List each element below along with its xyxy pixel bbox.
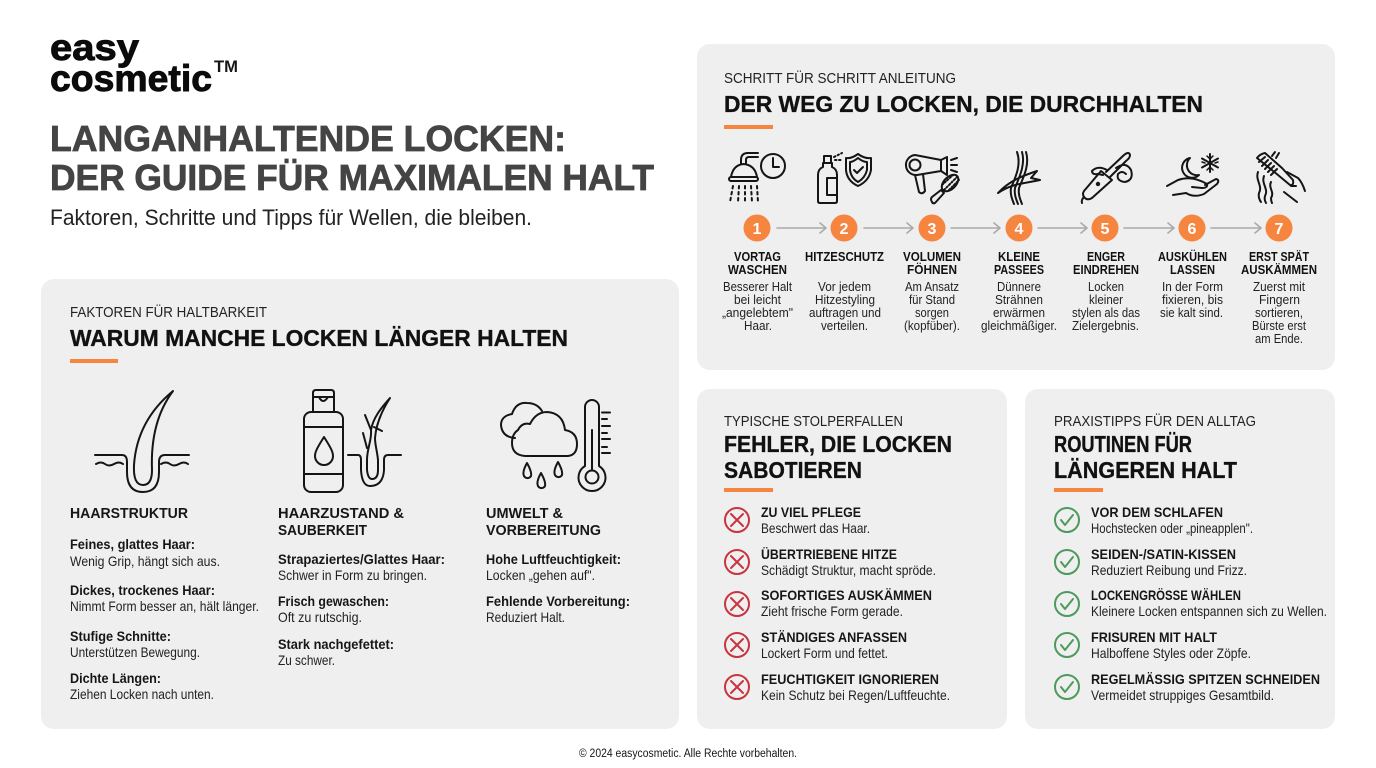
step 4 text: [981, 250, 1057, 333]
tip: curl size: LOCKENGRÖSSE WÄHLEN: [1091, 587, 1241, 603]
column: hair structure: Dichte Längen:: [70, 670, 161, 686]
panel: common mistakes: [697, 389, 1007, 729]
icon: heat protection spray and shield: [818, 153, 871, 203]
step 7 text: AUSKÄMMEN: [1241, 262, 1317, 277]
tip: silk pillow: Reduziert Reibung und Frizz.: [1091, 562, 1247, 578]
step 1 text: Haar.: [744, 319, 772, 333]
step 4 text: Strähnen: [995, 293, 1043, 307]
panel heading: mistakes: TYPISCHE STOLPERFALLEN: [724, 413, 903, 430]
column: hair structure: HAARSTRUKTUR: [70, 505, 188, 522]
step 1 text: VORTAG: [734, 250, 781, 264]
column: hair structure: [70, 505, 259, 702]
step 7 text: sortieren,: [1255, 306, 1303, 320]
title: LANGANHALTENDE LOCKEN:: [50, 118, 566, 159]
icon: hair follicle: [95, 391, 189, 492]
panel heading: factors: WARUM MANCHE LOCKEN LÄNGER HALTEN: [70, 325, 568, 351]
icon: hand with moon and snowflake: [1167, 154, 1218, 196]
step 2 text: Hitzestyling: [815, 293, 875, 307]
stepper: numbered circles and arrows: 2: [840, 221, 848, 238]
subtitle: Faktoren, Schritte und Tipps für Wellen, die bleiben.: [50, 205, 532, 230]
mistake: ignoring humidity: [725, 671, 950, 703]
panel heading: steps: SCHRITT FÜR SCHRITT ANLEITUNG: [724, 69, 956, 87]
stepper: numbered circles and arrows: 4: [1014, 221, 1024, 238]
column: hair condition and cleanliness: [278, 505, 445, 668]
panel: everyday tips: [1025, 389, 1335, 729]
column: hair structure: Wenig Grip, hängt sich aus.: [70, 553, 220, 569]
step 1 text: Besserer Halt: [723, 280, 792, 294]
panel heading: steps: DER WEG ZU LOCKEN, DIE DURCHHALTEN: [724, 91, 1203, 117]
tip: curl size: [1055, 587, 1327, 619]
step 1 text: „angelebtem": [722, 306, 793, 320]
step 4 text: PASSEES: [994, 263, 1044, 277]
mistake: excessive heat: Schädigt Struktur, macht spröde.: [761, 562, 936, 578]
stepper: numbered circles and arrows: 6: [1188, 221, 1196, 238]
step 7 text: am Ende.: [1255, 332, 1303, 346]
column: hair condition and cleanliness: Frisch gewaschen:: [278, 593, 389, 609]
step 3 text: FÖHNEN: [907, 262, 957, 277]
step 6 text: In der Form: [1162, 280, 1223, 294]
column: hair condition and cleanliness: Stark nachgefettet:: [278, 636, 394, 652]
tip: silk pillow: SEIDEN-/SATIN-KISSEN: [1091, 546, 1236, 562]
step 7 text: Bürste erst: [1252, 319, 1306, 333]
column: hair structure: Ziehen Locken nach unten.: [70, 686, 214, 702]
column: hair structure: Dickes, trockenes Haar:: [70, 582, 215, 598]
step 2 text: HITZESCHUTZ: [805, 250, 884, 264]
column: hair structure: Feines, glattes Haar:: [70, 536, 195, 552]
mistake: too much care: Beschwert das Haar.: [761, 520, 870, 536]
column: hair condition and cleanliness: HAARZUSTAND &: [278, 505, 404, 522]
step 3 text: Am Ansatz: [905, 280, 959, 294]
stepper: numbered circles and arrows: 3: [928, 221, 936, 238]
step 5 text: Zielergebnis.: [1072, 319, 1139, 333]
mistake: constant touching: STÄNDIGES ANFASSEN: [761, 629, 907, 645]
panel: factors for durability: [41, 279, 679, 729]
mistake: excessive heat: [725, 546, 936, 578]
panel heading: routines: [1054, 412, 1256, 492]
mistake: too much care: ZU VIEL PFLEGE: [761, 504, 861, 520]
step 2 text: auftragen und: [809, 306, 881, 320]
step 4 text: erwärmen: [993, 306, 1045, 320]
stepper: numbered circles and arrows: [744, 214, 1292, 242]
tip: trim ends regularly: REGELMÄSSIG SPITZEN SCHNEIDEN: [1091, 671, 1320, 687]
column: environment and preparation: [486, 505, 630, 625]
column: environment and preparation: Hohe Luftfeuchtigkeit:: [486, 551, 621, 567]
step 3 text: VOLUMEN: [903, 250, 961, 264]
step 4 text: Dünnere: [997, 280, 1041, 294]
step 6 text: LASSEN: [1170, 263, 1215, 277]
column: environment and preparation: UMWELT &: [486, 505, 563, 522]
panel heading: routines: LÄNGEREN HALT: [1054, 457, 1238, 483]
icon: curling iron with curl: [1082, 153, 1132, 203]
mistake: excessive heat: ÜBERTRIEBENE HITZE: [761, 546, 897, 562]
step 7 text: Zuerst mit: [1253, 280, 1305, 294]
step 5 text: stylen als das: [1072, 306, 1140, 320]
panel heading: routines: PRAXISTIPPS FÜR DEN ALLTAG: [1054, 412, 1256, 430]
tip: hairstyles with hold: [1055, 629, 1251, 661]
step 7 text: [1241, 249, 1317, 346]
step 6 text: AUSKÜHLEN: [1158, 249, 1227, 264]
panel heading: routines: ROUTINEN FÜR: [1054, 431, 1192, 457]
footer: © 2024 easycosmetic. Alle Rechte vorbehalten.: [579, 748, 797, 760]
tip: hairstyles with hold: Halboffene Styles oder Zöpfe.: [1091, 645, 1251, 661]
column: environment and preparation: Reduziert Halt.: [486, 609, 565, 625]
icon: clouds, rain and thermometer: [501, 400, 610, 491]
tip: trim ends regularly: [1055, 671, 1320, 703]
step 3 text: [903, 250, 961, 333]
mistake: ignoring humidity: Kein Schutz bei Regen/Luftfeuchte.: [761, 687, 950, 703]
step 2 text: [805, 250, 884, 333]
column: environment and preparation: Fehlende Vorbereitung:: [486, 593, 630, 609]
step 3 text: sorgen: [915, 306, 949, 320]
mistake: immediate combing: Zieht frische Form gerade.: [761, 603, 903, 619]
step 3 text: (kopfüber).: [904, 319, 960, 333]
panel heading: mistakes: SABOTIEREN: [724, 457, 862, 483]
stepper: numbered circles and arrows: 7: [1274, 221, 1284, 238]
column: environment and preparation: Locken „gehen auf".: [486, 567, 595, 583]
tip: before sleeping: [1055, 504, 1253, 536]
logo: easycosmetic: TM: [214, 57, 238, 76]
step 5 text: [1072, 250, 1140, 333]
column: hair condition and cleanliness: Schwer in Form zu bringen.: [278, 567, 427, 583]
column: hair structure: Unterstützen Bewegung.: [70, 644, 200, 660]
panel: step by step guide: [697, 44, 1335, 370]
panel heading: factors: [70, 303, 568, 363]
column: hair condition and cleanliness: Zu schwer.: [278, 652, 335, 668]
tip: silk pillow: [1055, 546, 1247, 578]
stepper: numbered circles and arrows: 1: [752, 221, 762, 238]
step 7 text: Fingern: [1259, 293, 1300, 307]
tip: hairstyles with hold: FRISUREN MIT HALT: [1091, 629, 1217, 645]
step 2 text: verteilen.: [821, 319, 868, 333]
icon: hair strands and clip: [998, 152, 1040, 204]
tip: trim ends regularly: Vermeidet struppiges Gesamtbild.: [1091, 687, 1274, 703]
step 4 text: gleichmäßiger.: [981, 319, 1057, 333]
mistake: constant touching: Lockert Form und fettet.: [761, 645, 888, 661]
step 6 text: sie kalt sind.: [1160, 306, 1223, 320]
tip: curl size: Kleinere Locken entspannen sich zu Wellen.: [1091, 603, 1327, 619]
step 5 text: ENGER: [1087, 250, 1125, 264]
icon: hair dryer and brush: [906, 155, 961, 203]
column: hair condition and cleanliness: Strapaziertes/Glattes Haar:: [278, 551, 445, 567]
step 5 text: Locken: [1088, 280, 1124, 294]
step 7 text: ERST SPÄT: [1249, 249, 1309, 264]
mistake: too much care: [725, 504, 870, 536]
mistake: immediate combing: [725, 587, 932, 619]
title: DER GUIDE FÜR MAXIMALEN HALT: [50, 157, 654, 198]
icon: comb and wavy hair: [1257, 152, 1305, 203]
step 1 text: bei leicht: [734, 293, 781, 307]
step 5 text: kleiner: [1089, 293, 1123, 307]
step 6 text: fixieren, bis: [1162, 293, 1223, 307]
mistake: immediate combing: SOFORTIGES AUSKÄMMEN: [761, 587, 932, 603]
step 2 text: Vor jedem: [818, 280, 871, 294]
panel heading: factors: FAKTOREN FÜR HALTBARKEIT: [70, 303, 267, 321]
step 5 text: EINDREHEN: [1073, 263, 1139, 277]
column: hair structure: Stufige Schnitte:: [70, 628, 171, 644]
column: hair condition and cleanliness: Oft zu rutschig.: [278, 609, 362, 625]
column: hair condition and cleanliness: SAUBERKEIT: [278, 522, 367, 539]
panel heading: steps: [724, 69, 1203, 129]
logo: easycosmetic: [50, 27, 238, 99]
panel heading: mistakes: FEHLER, DIE LOCKEN: [724, 431, 952, 457]
mistake: constant touching: [725, 629, 907, 661]
step 4 text: KLEINE: [998, 250, 1040, 264]
icon: shower and clock: [729, 153, 785, 202]
step 1 text: [722, 250, 793, 333]
title: [50, 118, 654, 198]
icon: shampoo bottle and damaged hair: [304, 390, 401, 492]
step 1 text: WASCHEN: [728, 263, 787, 277]
column: hair structure: Nimmt Form besser an, hält länger.: [70, 598, 259, 614]
tip: before sleeping: VOR DEM SCHLAFEN: [1091, 504, 1223, 520]
stepper: numbered circles and arrows: 5: [1100, 221, 1110, 238]
column: environment and preparation: VORBEREITUNG: [486, 522, 601, 539]
panel heading: mistakes: [724, 413, 952, 492]
tip: before sleeping: Hochstecken oder „pineapplen".: [1091, 520, 1253, 536]
logo: easycosmetic: cosmetic: [50, 58, 212, 99]
step 6 text: [1158, 249, 1227, 320]
mistake: ignoring humidity: FEUCHTIGKEIT IGNORIEREN: [761, 671, 939, 687]
step 3 text: für Stand: [909, 293, 955, 307]
logo: easycosmetic: easy: [50, 27, 139, 68]
